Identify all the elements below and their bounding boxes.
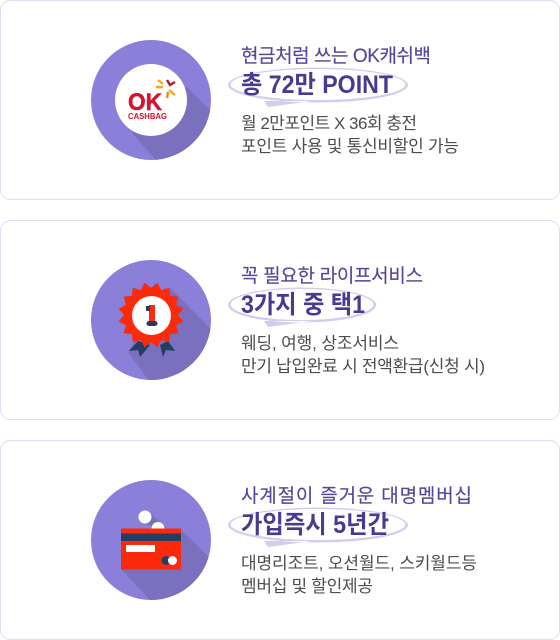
description [241,114,459,156]
description: 멤버십 및 할인제공 [241,577,373,596]
icon: credit card [91,480,215,605]
description: 대명리조트, 오션월드, 스키월드등 [241,554,477,573]
description: 월 2만포인트 X 36회 충전 [241,114,417,133]
highlight ellipse [228,68,408,107]
panel: life services [0,220,560,420]
description: 포인트 사용 및 통신비할인 가능 [241,137,459,156]
description [241,334,485,376]
panel: OK cashbag points [0,0,560,200]
icon: OK cashbag badge [91,40,215,165]
icon: first place rosette [91,260,215,385]
heading: 사계절이 즐거운 대명멤버십 [241,485,472,507]
description: 만기 납입완료 시 전액환급(신청 시) [241,357,485,376]
icon: OK cashbag badge: CASHBAG [128,112,167,121]
highlight ellipse [228,508,408,547]
description [241,554,477,596]
highlighted title: 3가지 중 택1 [241,291,365,319]
highlighted title: 가입즉시 5년간 [241,511,389,539]
heading: 현금처럼 쓰는 OK캐쉬백 [241,45,431,67]
description: 웨딩, 여행, 상조서비스 [241,334,399,353]
ribbons [129,341,175,357]
icon: OK cashbag badge: OK [128,89,163,116]
highlight ellipse [228,288,376,327]
highlighted title: 총 72만 POINT [241,71,393,99]
panel: membership [0,440,560,640]
numeral one [146,305,158,326]
heading: 꼭 필요한 라이프서비스 [241,265,423,287]
